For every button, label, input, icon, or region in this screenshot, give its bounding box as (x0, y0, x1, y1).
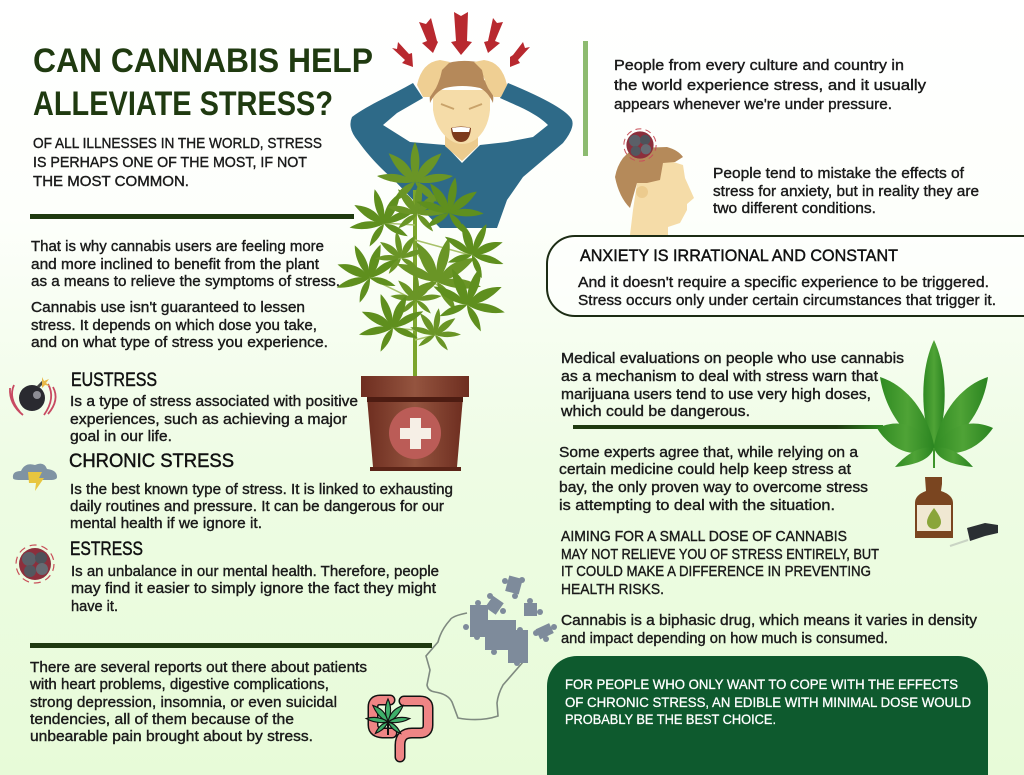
heading: chronic stress: CHRONIC STRESS (69, 451, 234, 472)
small dose callout text: IT COULD MAKE A DIFFERENCE IN PREVENTING (561, 564, 871, 580)
man neck and face (445, 128, 478, 161)
intro text (31, 239, 340, 351)
icon: oil bottle and dropper (915, 477, 998, 546)
conclusion text (565, 677, 971, 727)
bottom left text: There are several reports out there about patients (30, 660, 367, 676)
icon: intestines with cannabis leaf (366, 699, 428, 757)
small dose callout text: AIMING FOR A SMALL DOSE OF CANNABIS (561, 529, 847, 545)
top right text: appears whenever we're under pressure. (614, 97, 892, 113)
estress text: have it. (71, 599, 118, 615)
estress text: Is an unbalance in our mental health. Therefore, people (71, 564, 439, 580)
plant stem (413, 190, 417, 377)
medical evaluations text: Medical evaluations on people who use cannabis (561, 351, 904, 367)
panel: green conclusion box (547, 656, 988, 775)
man sweater (350, 83, 573, 228)
icon: bomb (10, 377, 56, 415)
biphasic text (561, 613, 978, 647)
divider bar (30, 214, 354, 219)
subtitle: IS PERHAPS ONE OF THE MOST, IF NOT (33, 155, 307, 171)
man hair (430, 61, 493, 103)
top right text (614, 58, 927, 113)
dropper (967, 523, 998, 541)
chronic stress text: Is the best known type of stress. It is linked to exhausting (70, 482, 453, 498)
estress text: may find it easier to simply ignore the fact they might (71, 581, 436, 597)
callout heading: ANXIETY IS IRRATIONAL AND CONSTANT (580, 246, 898, 265)
conclusion text: FOR PEOPLE WHO ONLY WANT TO COPE WITH THE EFFECTS (565, 677, 958, 692)
callout text: Stress occurs only under certain circumstances that trigger it. (578, 293, 996, 309)
top right text: People from every culture and country in (614, 58, 904, 74)
biphasic text: Cannabis is a biphasic drug, which means it varies in density (561, 613, 978, 629)
profile hair (615, 147, 683, 208)
divider bar (573, 425, 883, 429)
head outline (426, 613, 523, 720)
conclusion text: OF CHRONIC STRESS, AN EDIBLE WITH MINIMAL DOSE WOULD (565, 695, 971, 710)
small dose callout text (561, 529, 879, 598)
icon: storm cloud (13, 464, 57, 491)
bottom left text: with heart problems, digestive complications, (29, 677, 329, 693)
subtitle: THE MOST COMMON. (33, 174, 189, 190)
pot (367, 397, 463, 467)
medical evaluations text: as a mechanism to deal with stress warn that (561, 369, 878, 385)
eustress text: Is a type of stress associated with positive (70, 394, 358, 410)
eustress text: experiences, such as achieving a major (70, 412, 347, 428)
eustress text (70, 394, 358, 445)
subtitle: OF ALL ILLNESSES IN THE WORLD, STRESS (33, 136, 322, 152)
top right text: the world experience stress, and it usually (614, 78, 927, 94)
chronic stress text: daily routines and pressure. It can be dangerous for our (70, 499, 444, 515)
bottom left text (29, 660, 367, 745)
vertical accent bar (583, 41, 588, 156)
experts text (559, 445, 868, 514)
pot medical cross (389, 407, 441, 459)
plant leaves (324, 142, 516, 357)
estress text (71, 564, 439, 615)
stressed man illustration (350, 12, 573, 228)
puzzle cluster (463, 575, 557, 666)
anxiety text: two different conditions. (713, 201, 876, 217)
anxiety text: stress for anxiety, but in reality they are (713, 184, 979, 200)
icon: red stress arrows (392, 12, 530, 67)
experts text: is attempting to deal with the situation. (559, 498, 835, 514)
experts text: Some experts agree that, while relying on a (559, 445, 859, 461)
eustress text: goal in our life. (70, 429, 172, 445)
subtitle (33, 136, 322, 190)
intro text: as a means to relieve the symptoms of stress. (31, 274, 340, 290)
title (33, 42, 373, 123)
biphasic text: and impact depending on how much is consumed. (561, 631, 888, 647)
title: CAN CANNABIS HELP (33, 42, 373, 80)
bottom left text: unbearable pain brought about by stress. (30, 729, 313, 745)
small dose callout text: MAY NOT RELIEVE YOU OF STRESS ENTIRELY, BUT (561, 547, 879, 563)
anxiety text: People tend to mistake the effects of (713, 166, 965, 182)
intro text: stress. It depends on which dose you take, (31, 318, 317, 334)
icon: large cannabis leaf (877, 340, 993, 468)
medical evaluations text: which could be dangerous. (560, 404, 750, 420)
cannabis plant in pot (324, 142, 516, 471)
callout text: And it doesn't require a specific experience to be triggered. (578, 275, 989, 291)
man hands (417, 60, 507, 97)
small dose callout text: HEALTH RISKS. (561, 582, 664, 598)
icon: head profile with stress (615, 129, 694, 235)
anxiety text (713, 166, 979, 217)
title: ALLEVIATE STRESS? (33, 85, 333, 123)
experts text: certain medicine could help keep stress at (559, 462, 851, 478)
intro text: Cannabis use isn't guaranteed to lessen (31, 300, 305, 316)
bottom left text: tendencies, all of them because of the (30, 712, 294, 728)
profile skin (630, 160, 694, 235)
icon: estress brain (16, 545, 54, 583)
heading: eustress: EUSTRESS (71, 370, 157, 391)
callout text (578, 275, 996, 309)
chronic stress text (70, 482, 453, 532)
icon: head with puzzle pieces (426, 575, 557, 720)
intro text: and more inclined to benefit from the plant (31, 257, 319, 273)
conclusion text: PROBABLY BE THE BEST CHOICE. (565, 712, 776, 727)
bottom left text: strong depression, insomnia, or even suicidal (30, 695, 337, 711)
experts text: bay, the only proven way to overcome stress (559, 480, 868, 496)
intro text: That is why cannabis users are feeling more (31, 239, 324, 255)
man mouth (451, 126, 471, 142)
medical evaluations text: marijuana users tend to use very high doses, (561, 387, 871, 403)
divider bar (30, 643, 432, 648)
chronic stress text: mental health if we ignore it. (70, 516, 262, 532)
heading: estress: ESTRESS (70, 539, 143, 560)
panel: anxiety callout (547, 236, 1024, 316)
medical evaluations text (560, 351, 904, 420)
intro text: and on what type of stress you experience. (31, 335, 328, 351)
